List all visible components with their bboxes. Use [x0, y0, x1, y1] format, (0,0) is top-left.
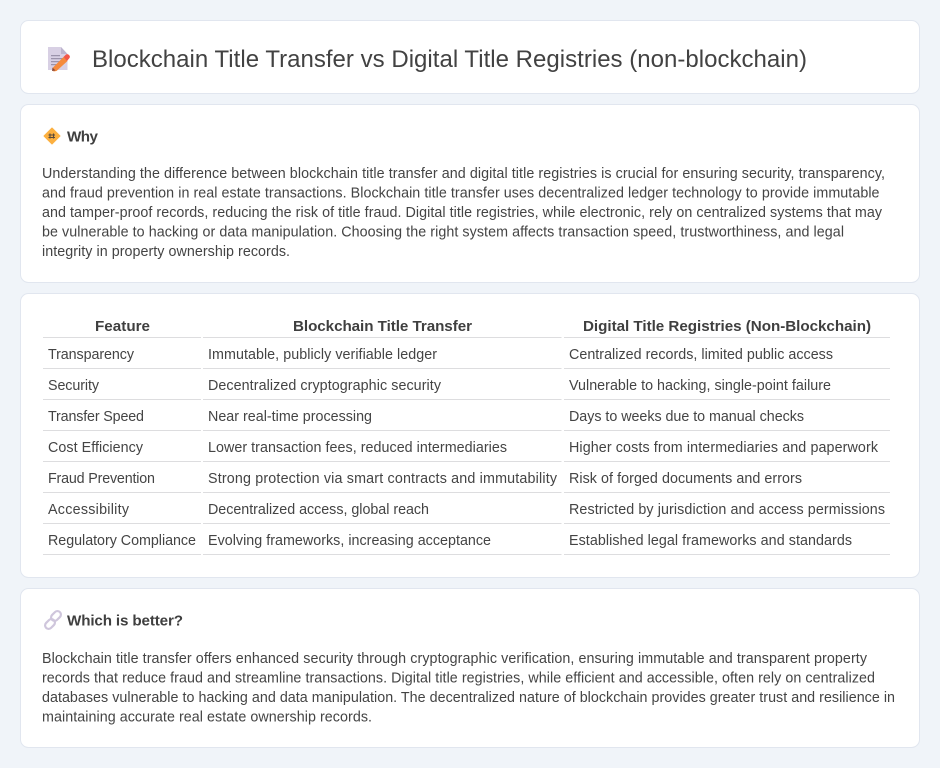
- table row: accessibility: [43, 502, 890, 524]
- table row: regulatory compliance: Established legal frameworks and standards: [569, 533, 852, 549]
- table row: cost efficiency: Lower transaction fees, reduced intermediaries: [208, 440, 507, 456]
- table row: transfer speed: [43, 409, 890, 431]
- table row: transfer speed: Days to weeks due to manual checks: [569, 409, 804, 425]
- text block: why paragraph: be vulnerable to hacking or data manipulation. Choosing the right system affects transaction speed, trustworthiness, and legal: [42, 224, 844, 240]
- panel: why: [20, 104, 920, 282]
- table header: [43, 318, 890, 338]
- table row: accessibility: Accessibility: [48, 502, 130, 518]
- text block: why paragraph: integrity in property ownership records.: [42, 244, 290, 260]
- icon: chain link: [44, 610, 62, 630]
- table row: accessibility: Restricted by jurisdiction and access permissions: [569, 502, 885, 518]
- table header: Digital Title Registries (Non-Blockchain): [583, 318, 871, 335]
- title: Blockchain Title Transfer vs Digital Title Registries (non-blockchain): [92, 46, 807, 73]
- table row: security: [43, 378, 890, 400]
- text block: which paragraph: records that reduce fraud and streamline transactions. Digital title registries, while efficient and accessible, often rely on centralized: [42, 670, 875, 686]
- table row: regulatory compliance: Evolving frameworks, increasing acceptance: [208, 533, 491, 549]
- text block: why paragraph: and tamper-proof records, reducing the risk of title fraud. Digital title registries, while electronic, rely on centralized systems that may: [42, 205, 883, 221]
- table header: Blockchain Title Transfer: [293, 318, 472, 335]
- text block: which paragraph: maintaining accurate real estate ownership records.: [42, 710, 372, 726]
- text block: which paragraph: databases vulnerable to hacking and data manipulation. The decentralized nature of blockchain provides greater trust and resilience in: [42, 690, 895, 706]
- table row: cost efficiency: Cost Efficiency: [48, 440, 144, 456]
- panel: which is better: [20, 588, 920, 748]
- table row: accessibility: Decentralized access, global reach: [208, 502, 429, 518]
- table row: regulatory compliance: [43, 533, 890, 555]
- table row: fraud prevention: Fraud Prevention: [48, 471, 155, 487]
- panel: title header: [20, 20, 920, 94]
- table row: security: Decentralized cryptographic security: [208, 378, 442, 394]
- table row: transparency: Immutable, publicly verifiable ledger: [208, 347, 437, 363]
- panel: comparison table: [20, 294, 920, 578]
- icon: document with pencil: [48, 47, 70, 72]
- icon: orange diamond sign: [44, 128, 60, 144]
- table row: cost efficiency: Higher costs from intermediaries and paperwork: [569, 440, 879, 456]
- table row: transfer speed: Near real-time processing: [208, 409, 372, 425]
- text block: which paragraph: [42, 651, 895, 726]
- table row: transparency: Centralized records, limited public access: [569, 347, 833, 363]
- table row: cost efficiency: [43, 440, 890, 462]
- table row: fraud prevention: [43, 471, 890, 493]
- table row: fraud prevention: Risk of forged documents and errors: [569, 471, 802, 487]
- table row: transparency: [43, 347, 890, 369]
- text block: why paragraph: and fraud prevention in real estate transactions. Blockchain title transfer uses decentralized ledger technology to provide immutable: [42, 186, 880, 202]
- table row: regulatory compliance: Regulatory Compliance: [48, 533, 196, 549]
- heading: which is better: Which is better?: [67, 612, 183, 630]
- table row: transparency: Transparency: [48, 347, 135, 363]
- table row: security: Vulnerable to hacking, single-point failure: [569, 378, 831, 394]
- heading: why: Why: [67, 128, 99, 146]
- table row: fraud prevention: Strong protection via smart contracts and immutability: [208, 471, 558, 487]
- text block: why paragraph: [42, 166, 885, 260]
- table row: transfer speed: Transfer Speed: [48, 409, 144, 425]
- text block: why paragraph: Understanding the difference between blockchain title transfer and digital title registries is crucial for ensuring security, transparency,: [42, 166, 885, 182]
- text block: which paragraph: Blockchain title transfer offers enhanced security through cryptographic verification, ensuring immutable and transparent property: [42, 651, 868, 667]
- table header: Feature: [95, 318, 150, 335]
- table row: security: Security: [48, 378, 100, 394]
